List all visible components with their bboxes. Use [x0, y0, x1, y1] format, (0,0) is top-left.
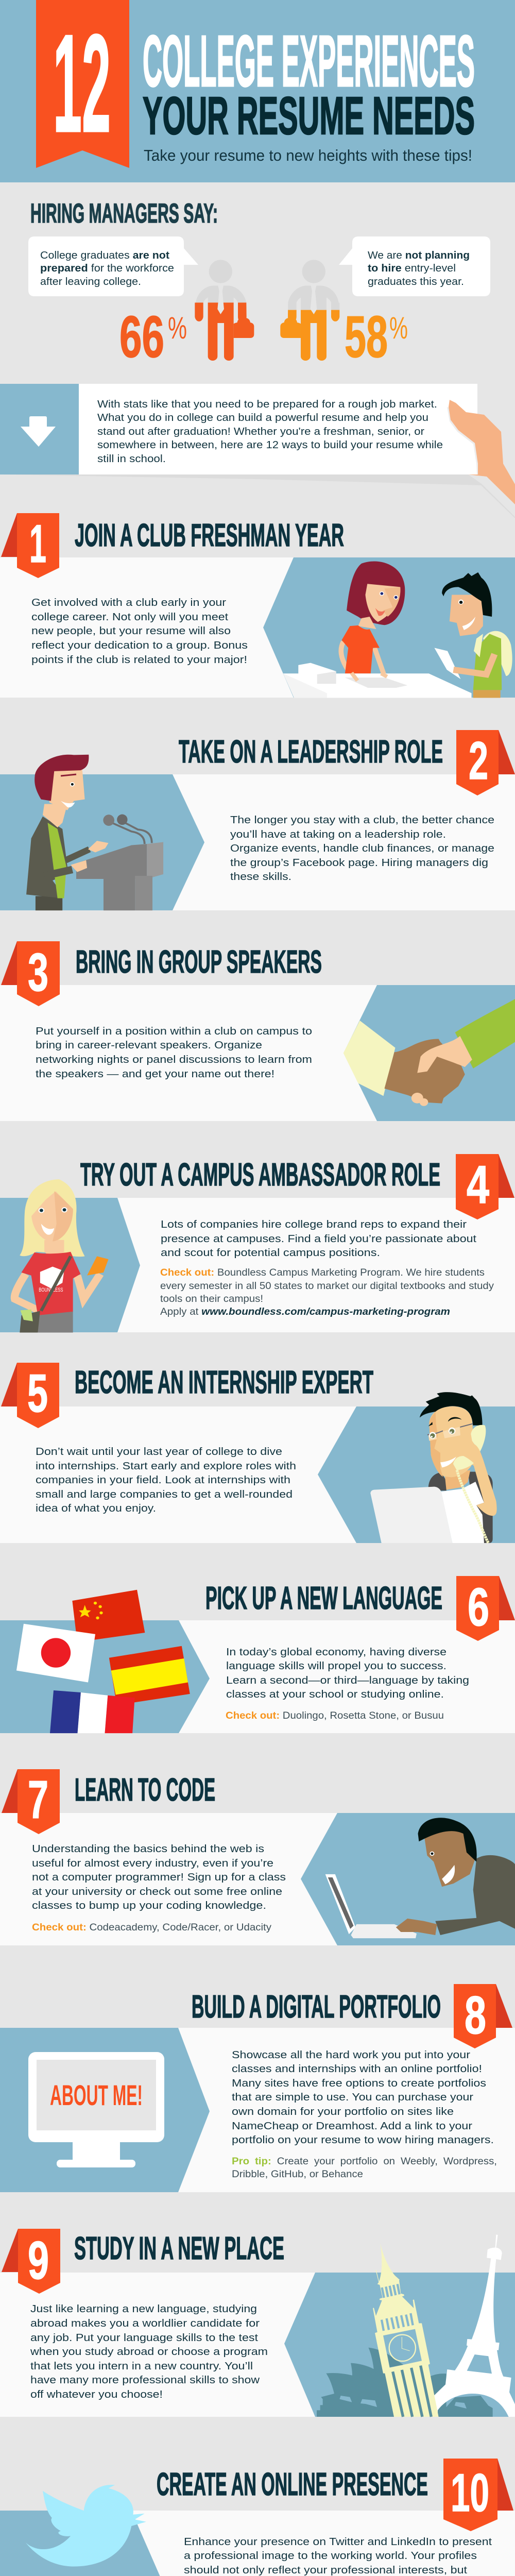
panel: tip 6: [0, 1576, 515, 1733]
illustration: speaker at podium: [26, 755, 163, 910]
illustration: campus ambassador: [14, 1179, 109, 1332]
illustration: handshake: [344, 999, 515, 1106]
body text: Get involved with a club early in your: [31, 597, 226, 608]
body text: when you study abroad or choose a program: [30, 2346, 268, 2358]
badge 5: [1, 1363, 59, 1428]
body text: Understanding the basics behind the web is: [32, 1843, 264, 1855]
header banner: 12: [53, 6, 111, 161]
body text: the speakers — and get your name out there!: [36, 1069, 274, 1080]
speech bubble right: We are not planning: [368, 250, 470, 261]
badge 10: 10: [451, 2463, 489, 2523]
badge 3: [1, 941, 60, 1006]
body text: any job. Put your language skills to the test: [30, 2332, 259, 2344]
check out note: [160, 1267, 494, 1317]
body text: Organize events, handle club finances, or manage: [230, 843, 494, 854]
speech bubble right: to hire entry-level: [368, 263, 456, 274]
illustration: flags: [16, 1590, 190, 1733]
check out note: every semester in all 50 states to market our digital textbooks and study: [160, 1280, 494, 1292]
body text: a professional image to the working world. Your profiles: [184, 2550, 477, 2562]
check out note: Check out: Codeacademy, Code/Racer, or Udacity: [32, 1922, 271, 1933]
pro tip note: Pro tip: Create your portfolio on Weebly, Wordpress,: [232, 2156, 497, 2167]
body text: portfolio on your resume to wow hiring managers.: [232, 2134, 494, 2146]
body text: the group’s Facebook page. Hiring managers dig: [230, 857, 488, 869]
stat 58 percent: %: [389, 311, 408, 345]
panel: tip 3: [0, 941, 515, 1121]
body text: not a computer programmer! Sign up for a class: [32, 1872, 286, 1883]
section: hiring managers say: [28, 198, 490, 370]
speech bubble left: [28, 236, 198, 296]
intro text: [97, 399, 443, 465]
panel: tip 7: [0, 1769, 515, 1945]
illustration: campus ambassador: BOUNDLESS: [39, 1287, 63, 1293]
body text: companies in your field. Look at internships with: [36, 1475, 290, 1486]
body text: into internships. Start early and explore roles with: [36, 1461, 296, 1472]
stat 66 percent: 66: [119, 304, 164, 370]
badge 1: 1: [29, 514, 46, 574]
body text: [184, 2536, 498, 2576]
badge 6: [456, 1576, 515, 1641]
body text: off whatever you choose!: [30, 2389, 163, 2400]
body text: [36, 1446, 296, 1514]
body text: Put yourself in a position within a club on campus to: [36, 1026, 312, 1037]
body text: [226, 1647, 469, 1700]
body text: [36, 1026, 312, 1080]
intro text: still in school.: [97, 453, 166, 465]
person icon 66 percent: [195, 260, 254, 361]
badge 9: [2, 2229, 60, 2294]
illustration: world landmarks: [317, 2234, 515, 2417]
header banner: [0, 0, 515, 182]
check out note: Check out: Boundless Campus Marketing Program. We hire students: [160, 1267, 485, 1278]
badge 3: 3: [28, 943, 48, 1003]
badge 2: [456, 730, 515, 795]
body text: classes to bump up your coding knowledge.: [32, 1900, 266, 1911]
body text: that are simple to use. You can purchase your: [232, 2092, 473, 2103]
body text: reflect your dedication to a group. Bonus: [31, 640, 248, 651]
badge 8: 8: [465, 1986, 486, 2045]
body text: have many more professional skills to show: [30, 2375, 260, 2386]
body text: Lots of companies hire college brand reps to expand their: [161, 1219, 467, 1230]
panel: tip 10: [0, 2459, 515, 2576]
subtitle: Take your resume to new heights with these tips!: [144, 146, 472, 164]
body text: new people, but your resume will also: [31, 625, 231, 637]
heading: STUDY IN A NEW PLACE: [74, 2231, 284, 2266]
body text: NameCheap or Dreamhost. Add a link to your: [232, 2121, 472, 2132]
badge 10: [443, 2459, 513, 2531]
panel: tip 1: [0, 513, 515, 698]
illustration: monitor: ABOUT ME!: [50, 2079, 143, 2111]
intro panel: [0, 384, 515, 518]
body text: [230, 815, 494, 883]
hand illustration: [447, 400, 515, 504]
badge 2: 2: [469, 731, 488, 791]
badge 1: [1, 513, 59, 578]
panel: tip 8: [0, 1984, 515, 2192]
stat 58 percent: 58: [345, 304, 388, 370]
body text: [232, 2049, 494, 2146]
body text: should not only reflect your professional interests, but: [184, 2565, 468, 2576]
body text: In today’s global economy, having diverse: [226, 1647, 447, 1658]
illustration: student coding on laptop: [325, 1818, 515, 1938]
body text: that lets you intern in a new country. You’ll: [30, 2361, 253, 2372]
badge 7: 7: [28, 1770, 48, 1830]
body text: you’ll have at taking on a leadership role.: [230, 829, 446, 840]
body text: abroad makes you a worldlier candidate for: [30, 2318, 260, 2329]
pro tip note: [232, 2156, 497, 2180]
body text: [30, 2303, 268, 2400]
body text: college career. Not only will you meet: [31, 612, 229, 623]
panel: tip 5: [0, 1363, 515, 1543]
body text: points if the club is related to your major!: [31, 654, 247, 666]
body text: classes at your school or studying online.: [226, 1689, 444, 1700]
panel: tip 4: [0, 1154, 515, 1332]
badge 5: 5: [27, 1364, 48, 1423]
body text: classes and internships with an online portfolio!: [232, 2063, 482, 2075]
badge 9: 9: [28, 2231, 49, 2291]
body text: Enhance your presence on Twitter and LinkedIn to present: [184, 2536, 492, 2548]
body text: small and large companies to get a well-rounded: [36, 1489, 293, 1500]
body text: Many sites have free options to create portfolios: [232, 2078, 486, 2089]
check out note: Apply at www.boundless.com/campus-marketing-program: [160, 1306, 450, 1317]
pro tip note: Dribble, GitHub, or Behance: [232, 2168, 363, 2180]
body text: Don’t wait until your last year of college to dive: [36, 1446, 282, 1458]
badge 4: [456, 1154, 514, 1219]
intro text: What you do in college can build a powerful resume and help you: [97, 412, 428, 423]
speech bubble left: prepared for the workforce: [40, 263, 174, 274]
check out note: Check out: Duolingo, Rosetta Stone, or Busuu: [226, 1710, 444, 1721]
heading: HIRING MANAGERS SAY:: [30, 198, 218, 229]
speech bubble right: graduates this year.: [368, 276, 464, 287]
badge 6: 6: [468, 1578, 489, 1637]
intro text: somewhere in between, here are 12 ways to build your resume while: [97, 439, 443, 451]
body text: and scout for potential campus positions.: [161, 1247, 380, 1259]
heading: LEARN TO CODE: [75, 1772, 215, 1808]
body text: idea of what you enjoy.: [36, 1503, 156, 1514]
speech bubble right: [339, 236, 490, 296]
body text: own domain for your portfolio on sites like: [232, 2106, 454, 2117]
person icon 58 percent: [280, 260, 339, 361]
illustration: twitter birds: [26, 2485, 146, 2576]
check out note: tools on their campus!: [160, 1293, 263, 1304]
speech bubble left: after leaving college.: [40, 276, 141, 287]
badge 4: 4: [467, 1155, 489, 1215]
badge 8: [454, 1984, 512, 2048]
body text: [161, 1219, 476, 1259]
body text: networking nights or panel discussions to learn from: [36, 1054, 312, 1065]
body text: these skills.: [230, 871, 291, 883]
body text: Showcase all the hard work you put into your: [232, 2049, 470, 2061]
body text: bring in career-relevant speakers. Organize: [36, 1040, 262, 1051]
badge 7: [2, 1769, 60, 1834]
body text: Just like learning a new language, studying: [30, 2303, 257, 2315]
speech bubble left: College graduates are not: [40, 250, 169, 261]
intro text: With stats like that you need to be prepared for a rough job market.: [97, 399, 437, 410]
body text: language skills will propel you to success.: [226, 1660, 447, 1672]
illustration: monitor: [28, 2052, 164, 2167]
body text: useful for almost every industry, even if you’re: [32, 1858, 273, 1869]
intro text: stand out after graduation! Whether you're a freshman, senior, or: [97, 426, 424, 437]
illustration: students at club desk: [283, 562, 512, 698]
illustration: intern on the phone: [370, 1392, 497, 1543]
body text: The longer you stay with a club, the better chance: [230, 815, 494, 826]
body text: Learn a second—or third—language by taking: [226, 1675, 469, 1686]
ribbon with number 12: [36, 0, 129, 168]
icon: down arrow: [21, 416, 56, 447]
body text: [32, 1843, 286, 1911]
body text: [31, 597, 248, 666]
body text: presence at campuses. Find a field you’re passionate about: [161, 1233, 476, 1245]
body text: at your university or check out some free online: [32, 1886, 282, 1897]
panel: tip 2: [0, 730, 515, 910]
stat 66 percent: %: [168, 311, 187, 345]
panel: tip 9: [0, 2229, 515, 2417]
